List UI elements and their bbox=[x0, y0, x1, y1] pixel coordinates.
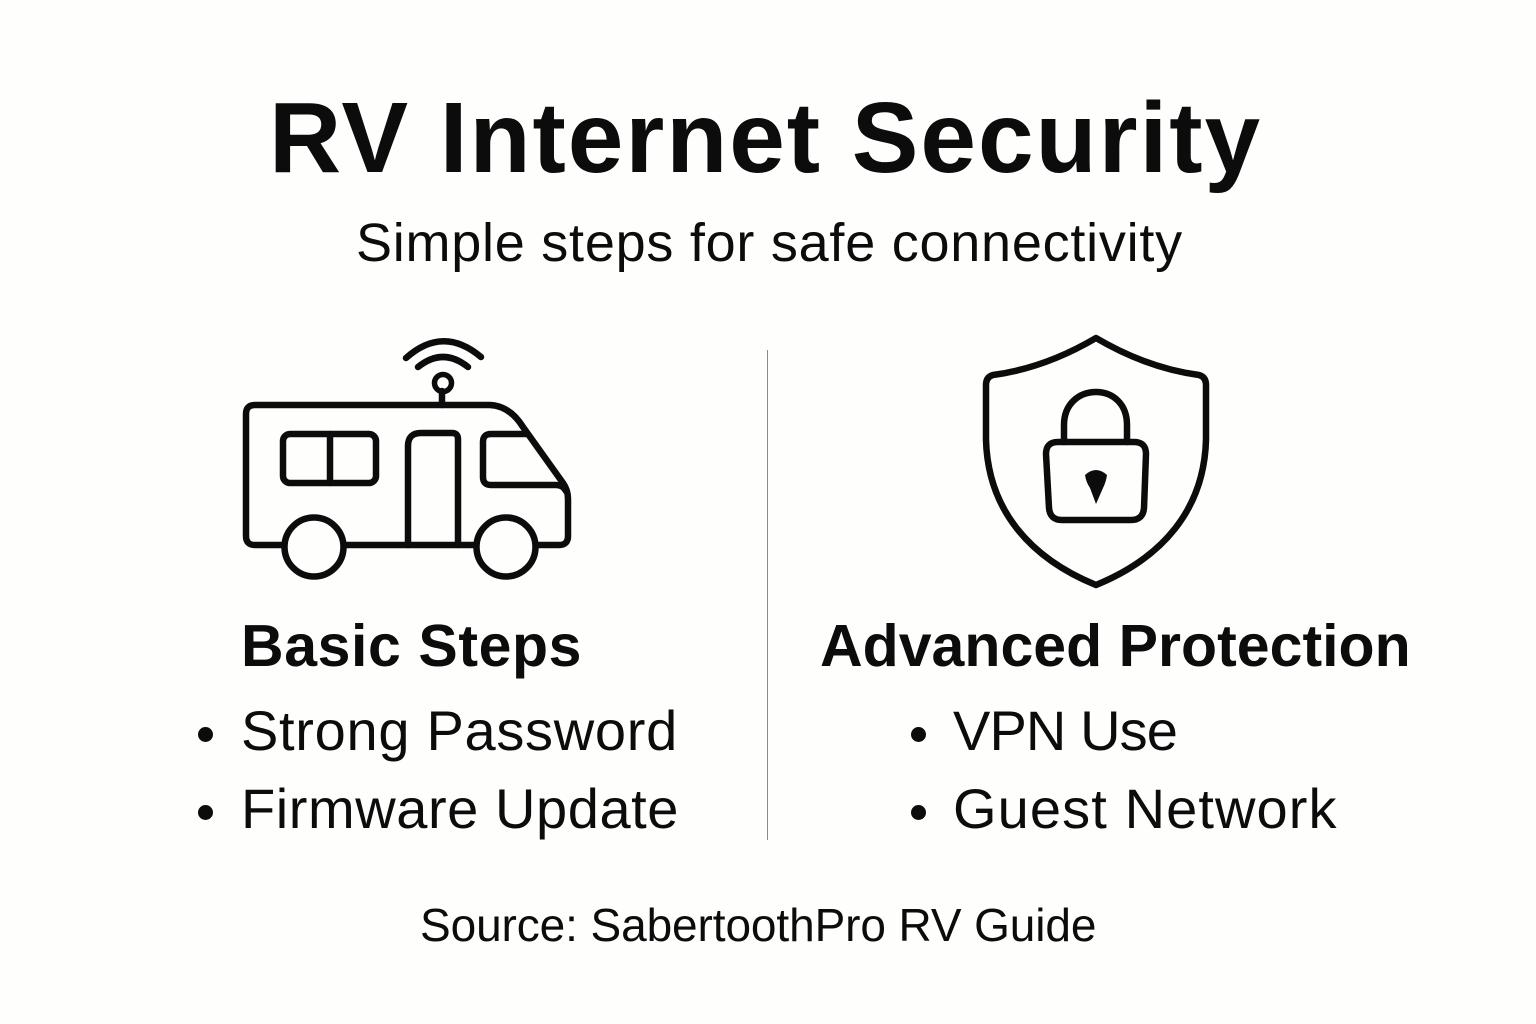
bullet item: Firmware Update: Firmware Update bbox=[241, 777, 679, 840]
heading: Advanced Protection: Advanced Protection bbox=[820, 613, 1411, 679]
bullet item: Strong Password: Strong Password bbox=[241, 699, 678, 762]
bullet item: Guest Network: Guest Network bbox=[953, 777, 1338, 840]
icon: RV with wifi bbox=[242, 338, 572, 580]
source note: Source: SabertoothPro RV Guide bbox=[420, 899, 1096, 951]
list: basic steps bbox=[198, 699, 679, 840]
divider bbox=[767, 350, 768, 840]
list: advanced protection bbox=[911, 699, 1338, 840]
heading: Basic Steps: Basic Steps bbox=[241, 613, 582, 679]
subtitle: Simple steps for safe connectivity bbox=[356, 213, 1183, 273]
title: RV Internet Security bbox=[269, 82, 1262, 194]
bullet item: VPN Use: VPN Use bbox=[953, 699, 1177, 762]
icon: shield with padlock bbox=[982, 334, 1210, 588]
